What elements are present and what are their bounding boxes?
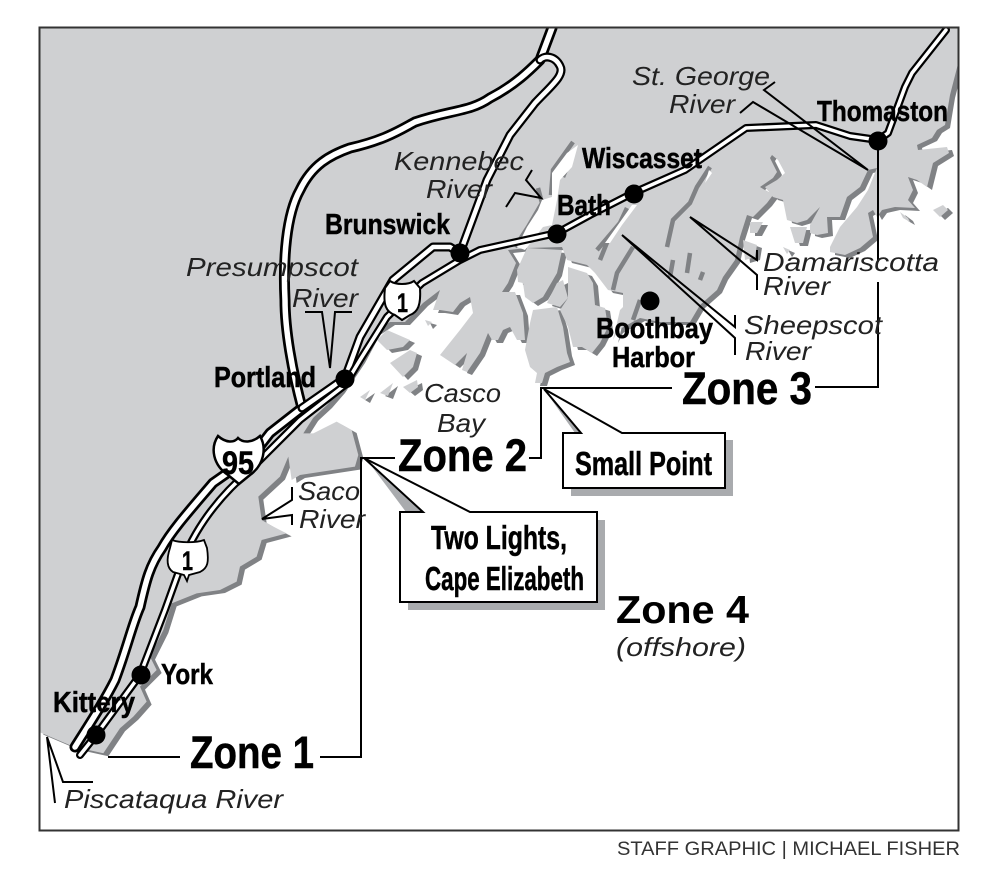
river and bay labels: Presumpscot — [186, 252, 360, 282]
callout: Two Lights, Cape Elizabeth: Cape Elizabeth — [425, 560, 584, 597]
river and bay labels: River — [426, 174, 493, 204]
river and bay labels: St. George — [632, 61, 770, 91]
town labels — [53, 96, 948, 719]
town labels: Thomaston — [817, 96, 948, 128]
icon: route 1 shield north: 1 — [397, 288, 408, 318]
callout: Small Point — [544, 389, 733, 496]
zone labels: Zone 4 — [616, 589, 749, 632]
river and bay labels: Damariscotta — [763, 247, 939, 277]
river and bay labels: River — [745, 336, 812, 366]
town labels: York — [161, 659, 214, 691]
town labels: Boothbay — [596, 313, 713, 345]
river and bay labels: River — [669, 89, 736, 119]
river and bay labels: Bay — [437, 408, 487, 438]
river and bay labels: Saco — [298, 476, 360, 506]
river and bay labels: Kennebec — [394, 146, 524, 176]
icon: interstate 95 shield — [214, 436, 264, 484]
zone labels: Zone 2 — [398, 430, 527, 481]
town labels: Kittery — [53, 687, 135, 719]
river leader lines — [47, 82, 868, 803]
river and bay labels — [64, 61, 939, 814]
zone labels: Zone 3 — [682, 363, 812, 414]
map panel — [30, 17, 975, 756]
town labels: Portland — [214, 362, 316, 394]
icon: route 1 shield south — [168, 540, 208, 581]
inlets — [517, 145, 712, 250]
town markers — [86, 132, 888, 744]
river and bay labels: River — [763, 271, 831, 301]
river and bay labels: Sheepscot — [744, 310, 884, 340]
river and bay labels: River — [292, 283, 359, 313]
inlet shading — [515, 142, 710, 320]
town labels: Wiscasset — [582, 143, 702, 175]
river and bay labels: Casco — [424, 378, 501, 408]
river and bay labels: Piscataqua River — [64, 784, 284, 814]
road: route 1 — [80, 30, 946, 755]
offshore note: (offshore) — [616, 632, 746, 662]
zone leader lines — [108, 150, 878, 757]
zone labels — [190, 363, 812, 778]
town labels: Bath — [557, 190, 611, 222]
icon: route 1 shield south: 1 — [182, 546, 193, 576]
town labels: Brunswick — [325, 209, 451, 241]
callout: Two Lights, Cape Elizabeth: Two Lights, — [431, 519, 567, 556]
callout: Small Point: Small Point — [575, 445, 712, 482]
road: interstate 95 — [75, 28, 561, 747]
callout: Two Lights, Cape Elizabeth — [364, 458, 605, 610]
coast shadow — [35, 20, 975, 756]
credit: STAFF GRAPHIC | MICHAEL FISHER — [617, 839, 960, 860]
icon: interstate 95 shield: 95 — [222, 445, 254, 481]
icon: route 1 shield north — [384, 281, 420, 320]
river and bay labels: River — [299, 504, 366, 534]
town labels: Harbor — [612, 342, 695, 374]
zone labels: Zone 1 — [190, 727, 314, 778]
land mass — [30, 17, 970, 753]
